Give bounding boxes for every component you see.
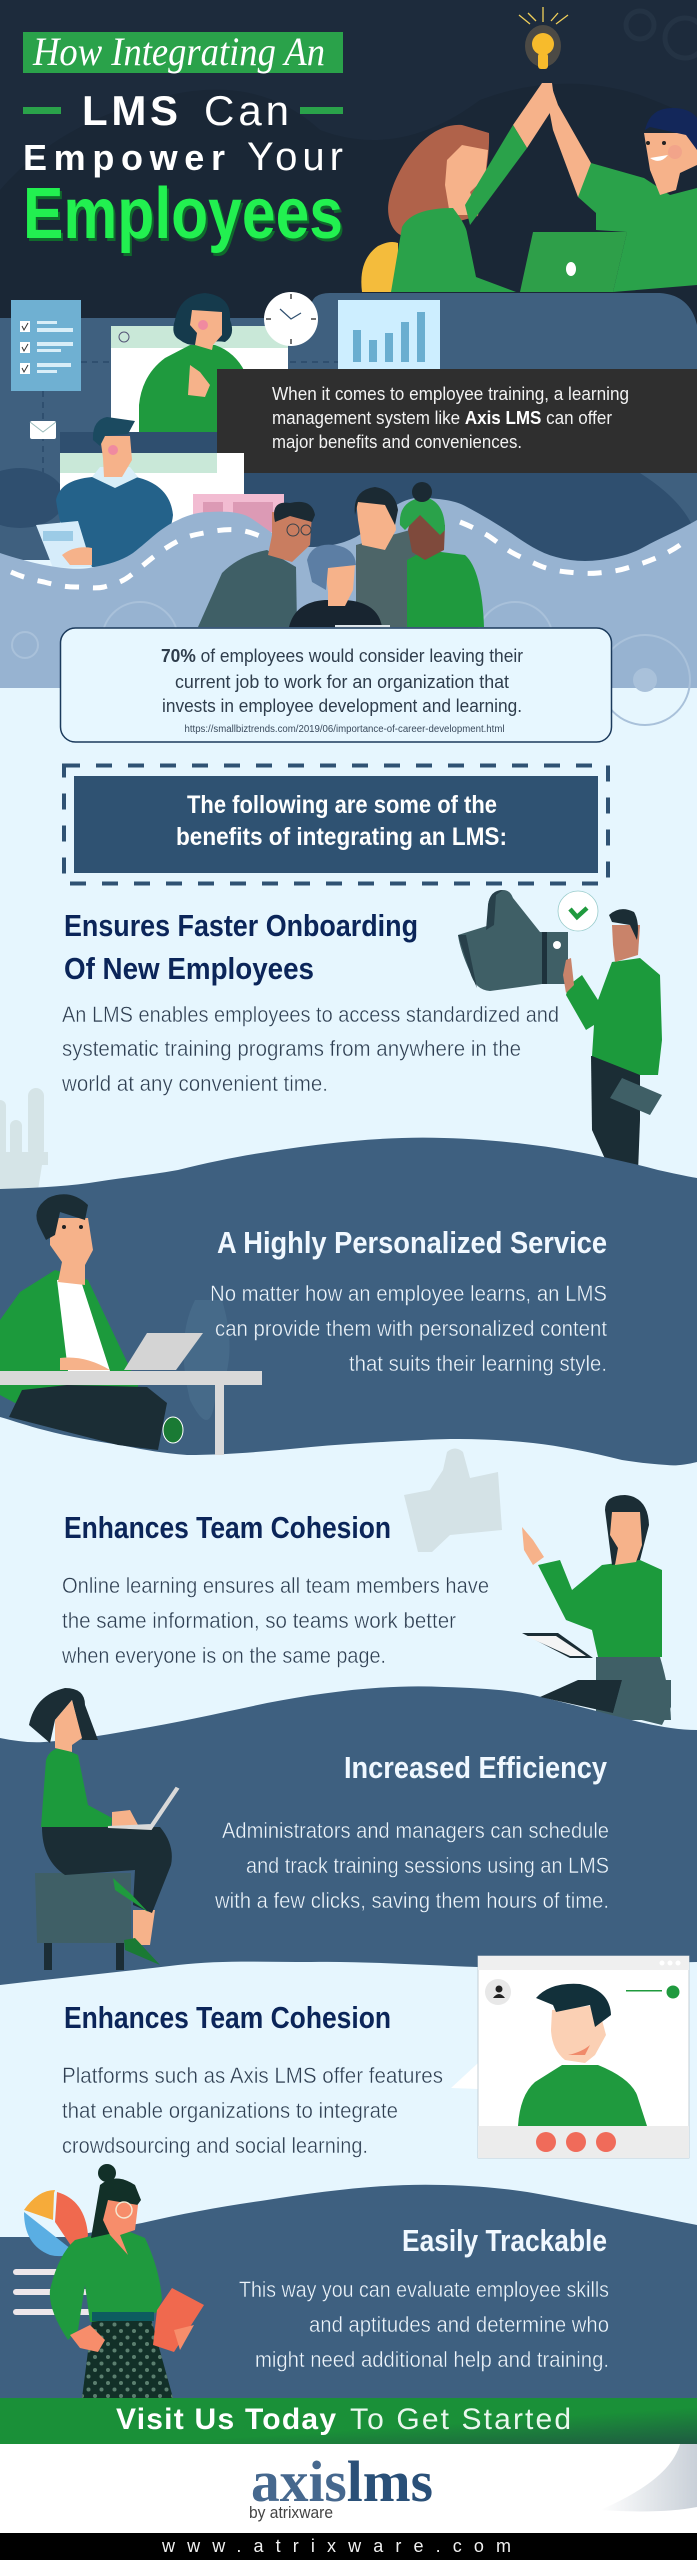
body text: platforms: that enable organizations to integrate: [62, 2098, 398, 2123]
title line: Empower Your: [23, 135, 343, 179]
illustration: man at desk: [0, 1194, 262, 1455]
body text: personalized service: that suits their learning style.: [349, 1351, 607, 1376]
title line: LMS Can: [23, 87, 343, 134]
title line: Empower Your: Your: [247, 135, 343, 179]
icon: envelope: [30, 421, 56, 439]
call to action band: [0, 2398, 697, 2444]
heading: onboarding: Ensures Faster Onboarding: [64, 908, 418, 943]
section band: easily trackable: [0, 2164, 697, 2398]
banner: benefits intro: [64, 766, 608, 884]
body text: onboarding: systematic training programs from anywhere in the: [62, 1036, 521, 1061]
add contact icon: [485, 1979, 511, 2005]
window with woman in green sweater: [111, 293, 288, 432]
body text: onboarding: [61, 1002, 559, 1096]
section band: increased efficiency: [0, 1680, 697, 1985]
illustration: woman with book: [50, 2164, 204, 2398]
heading: onboarding: [64, 908, 418, 986]
body text: increased efficiency: Administrators and managers can schedule: [222, 1818, 609, 1843]
body text: onboarding: An LMS enables employees to access standardized and: [62, 1002, 559, 1027]
section: team cohesion 1: [61, 1448, 671, 1720]
section band: personalized service: [0, 1138, 697, 1465]
body text: easily trackable: and aptitudes and determine who: [309, 2312, 609, 2337]
title line: Employees: Employees: [23, 174, 343, 254]
body text: team cohesion: Online learning ensures all team members have: [62, 1573, 489, 1598]
icon: light bulb: [519, 7, 568, 69]
header panel: [0, 0, 697, 330]
icon: plant: [0, 1088, 48, 1190]
section: faster onboarding: [0, 890, 662, 1190]
bar chart panel: [338, 300, 440, 369]
body text: platforms: [62, 2063, 443, 2158]
body text: increased efficiency: and track training sessions using an LMS: [246, 1853, 609, 1878]
decorative list lines: [13, 2269, 93, 2315]
website bar: [0, 2533, 697, 2560]
heading: team cohesion second: Enhances Team Cohesion: [64, 2000, 391, 2035]
icon: pie chart: [24, 2190, 88, 2256]
banner: benefits intro: The following are some of the: [187, 791, 497, 819]
intro text box: management system like Axis LMS can offer: [272, 408, 612, 428]
window with man in blue sweater: [36, 417, 284, 568]
title line: Empower Your: Empower: [23, 137, 225, 178]
light blue wave band: [0, 498, 697, 688]
call to action band: Visit Us Today: [116, 2403, 336, 2436]
body text: platforms: Platforms such as Axis LMS offer features: [62, 2063, 443, 2088]
heading: increased efficiency: Increased Efficiency: [344, 1750, 608, 1785]
title line: LMS Can: LMS: [82, 87, 178, 134]
call to action band: To Get Started: [350, 2403, 571, 2436]
illustration: woman with laptop on stool: [29, 1688, 178, 1970]
title line: LMS Can: Can: [204, 87, 289, 134]
body text: increased efficiency: [214, 1818, 609, 1913]
dashed road line: [11, 522, 680, 588]
section: team cohesion 2: [62, 1956, 689, 2158]
hero blue panel: [0, 293, 697, 580]
body text: team cohesion: when everyone is on the same page.: [61, 1643, 386, 1668]
icon: thumbs up: [458, 890, 568, 991]
title banner: How Integrating An: How Integrating An: [32, 29, 325, 74]
heading: onboarding: Of New Employees: [64, 951, 314, 986]
heading: team cohesion: Enhances Team Cohesion: [64, 1510, 391, 1545]
intro text box: major benefits and conveniences.: [272, 432, 522, 452]
website bar: www.atrixware.com: [161, 2536, 511, 2556]
faint avatar circles: [12, 602, 690, 725]
body text: personalized service: No matter how an employee learns, an LMS: [210, 1281, 607, 1306]
callout: 70% statistic: https://smallbiztrends.com/2019/06/importance-of-career-development.html: [184, 724, 504, 735]
title line: Employees: Employees: [25, 177, 345, 257]
body text: platforms: crowdsourcing and social learning.: [62, 2133, 368, 2158]
callout: 70% statistic: 70% of employees would consider leaving their: [161, 646, 523, 666]
icon: checklist panel: [11, 300, 81, 391]
body text: personalized service: can provide them with personalized content: [215, 1316, 607, 1341]
body text: personalized service: [210, 1281, 607, 1376]
man on video: [518, 1984, 647, 2126]
callout: 70% statistic: current job to work for an organization that: [175, 672, 509, 692]
intro text box: [217, 369, 697, 473]
status indicator: [626, 1986, 680, 1998]
logo footer: [0, 2444, 697, 2533]
body text: onboarding: world at any convenient time.: [61, 1071, 328, 1096]
intro text box: When it comes to employee training, a learning: [272, 384, 629, 404]
call buttons: [536, 2132, 616, 2152]
icon: clock: [264, 292, 318, 346]
heading: easily trackable: Easily Trackable: [402, 2223, 607, 2258]
heading: personalized service: A Highly Personalized Service: [217, 1225, 607, 1260]
faint leaves: [184, 1300, 230, 1420]
callout: 70% statistic: [60, 628, 612, 742]
illustration: woman's skirt overlap: [540, 1680, 671, 1725]
illustration: team of four: [198, 482, 484, 628]
body text: easily trackable: This way you can evaluate employee skills: [239, 2277, 609, 2302]
illustration: woman pointing with tablet: [522, 1495, 671, 1720]
body text: easily trackable: might need additional help and training.: [255, 2347, 609, 2372]
logo: axislms: by atrixware: [249, 2503, 333, 2522]
banner: benefits intro: benefits of integrating an LMS:: [176, 823, 507, 851]
body text: increased efficiency: with a few clicks, saving them hours of time.: [214, 1888, 609, 1913]
logo: axislms: axislms: [251, 2449, 433, 2514]
body text: easily trackable: [239, 2277, 609, 2372]
video call window: [451, 1956, 689, 2158]
icon: faded thumbs up: [404, 1448, 502, 1552]
illustration: man with folder: [563, 909, 662, 1172]
body text: team cohesion: [61, 1573, 489, 1668]
icon: speech bubble with check: [558, 891, 598, 931]
illustration: high five: [361, 83, 697, 292]
callout: 70% statistic: invests in employee development and learning.: [162, 696, 522, 716]
body text: team cohesion: the same information, so teams work better: [62, 1608, 456, 1633]
